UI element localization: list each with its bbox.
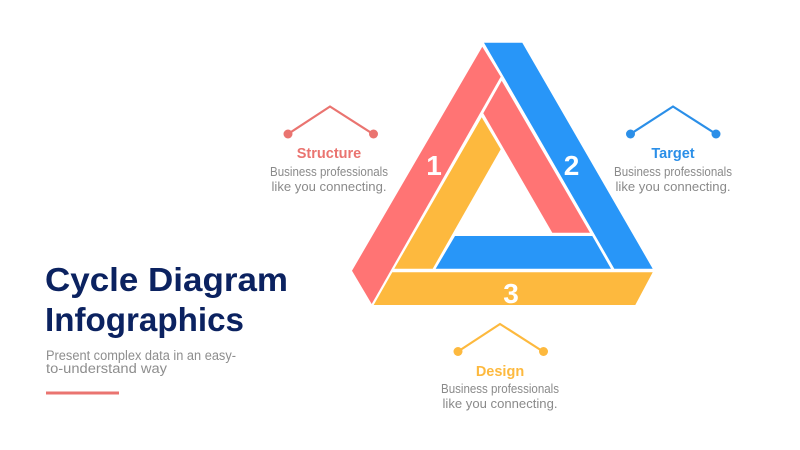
segment: yellow inner band [394, 117, 501, 269]
callout: Structure [270, 106, 388, 194]
callout: Design [441, 324, 559, 411]
segment: red outer band [352, 47, 501, 304]
text: Design description [441, 382, 559, 411]
text: Structure description: like you connecting. [272, 180, 386, 194]
text: Structure description [270, 165, 388, 194]
segment: red inner band [483, 81, 590, 233]
subtitle text: to-understand way [46, 361, 167, 376]
title: Cycle Diagram [45, 261, 288, 298]
heading: Design: Design [476, 364, 524, 380]
text: Target description: like you connecting. [616, 180, 730, 194]
heading: Structure: Structure [297, 146, 361, 162]
segment: blue inner band [436, 236, 611, 269]
heading: Target: Target [651, 146, 695, 162]
segment: blue outer band [484, 43, 653, 269]
number 2: 2 [564, 150, 579, 181]
subtitle text: Present complex data in an easy- [46, 348, 236, 363]
penrose triangle diagram [352, 43, 653, 309]
title [45, 261, 288, 338]
icon: yellow peak connector [454, 324, 548, 356]
number 3: 3 [503, 278, 519, 309]
title: Infographics [45, 301, 244, 338]
text: Structure description: Business professionals [270, 165, 388, 179]
text: Design description: Business professionals [441, 382, 559, 396]
callout: Target [614, 106, 732, 194]
text: Design description: like you connecting. [442, 397, 558, 411]
text: Target description: Business professionals [614, 165, 732, 179]
number 1: 1 [426, 150, 442, 181]
icon: blue peak connector [626, 106, 720, 138]
segment: yellow outer band [374, 272, 653, 305]
subtitle text [46, 348, 236, 376]
text: Target description [614, 165, 732, 194]
accent underline [46, 392, 119, 394]
icon: red peak connector [284, 106, 378, 138]
